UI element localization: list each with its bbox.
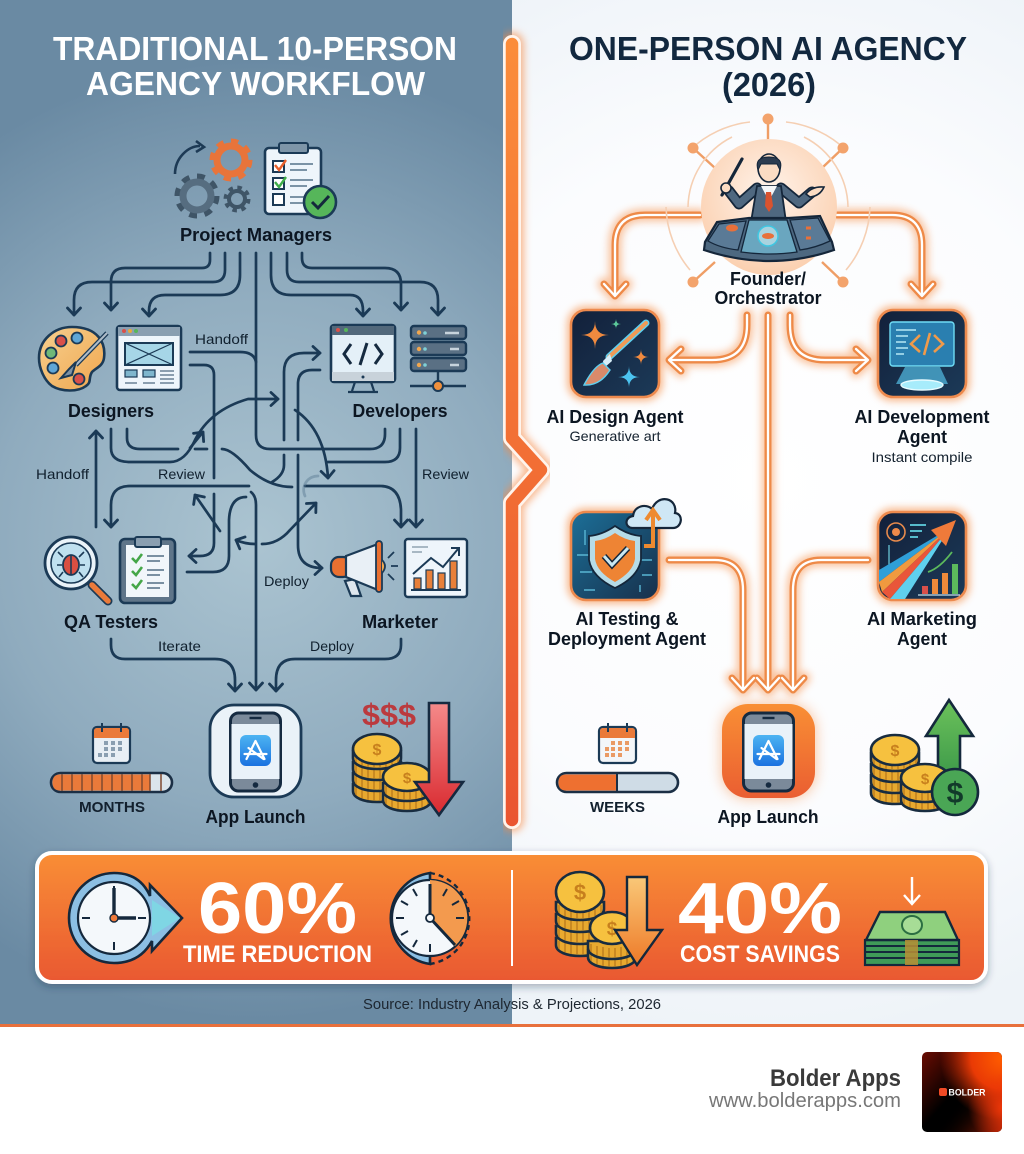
brand name: Bolder Apps <box>770 1065 901 1092</box>
icon: AI testing and deployment agent tile <box>571 499 681 600</box>
workflow labels: Deploy <box>310 638 354 654</box>
label: developers: Developers <box>352 401 448 421</box>
source note: Source: Industry Analysis & Projections, 2026 <box>363 997 661 1013</box>
icon: high cost coins with red arrow: $ <box>403 770 412 787</box>
icon: coins with down arrow: $ <box>607 919 618 940</box>
label: AI design agent: AI Design Agent <box>546 407 684 427</box>
statistic: 60 percent: 60% <box>198 869 357 949</box>
right heading <box>569 30 967 103</box>
footer orange rule <box>0 1024 1024 1027</box>
panel: results banner <box>37 853 986 982</box>
left panel background <box>0 0 512 1025</box>
brand url: www.bolderapps.com <box>708 1090 901 1112</box>
icon: marketer megaphone and chart <box>331 539 467 597</box>
label: founder orchestrator: Founder/ <box>730 269 806 289</box>
label: AI app launch: App Launch <box>718 807 818 827</box>
right heading: (2026) <box>722 66 816 103</box>
icon: AI app launch <box>722 704 815 798</box>
label: project managers: Project Managers <box>180 225 332 245</box>
label: QA testers: QA Testers <box>64 612 158 632</box>
icon: cash stack <box>865 877 959 965</box>
icon: weeks calendar <box>599 723 636 763</box>
workflow labels: Review <box>422 466 470 482</box>
icon: profit coins with green arrow <box>871 700 978 815</box>
workflow labels: Deploy <box>264 573 309 589</box>
workflow labels <box>36 331 470 654</box>
right panel background <box>512 0 1024 1025</box>
label: AI marketing agent <box>867 609 977 649</box>
icon: AI development agent tile <box>878 310 966 397</box>
icon: profit coins with green arrow: $ <box>947 777 964 810</box>
icon: AI marketing agent tile <box>878 512 966 600</box>
label: AI development agent: AI Development <box>854 407 990 427</box>
icon: high cost coins with red arrow: $$$ <box>362 697 416 732</box>
label: AI design agent: Generative art <box>570 428 661 444</box>
label: AI development agent: Instant compile <box>872 449 973 465</box>
workflow labels: Handoff <box>36 466 89 482</box>
label: AI marketing agent: AI Marketing <box>867 609 977 629</box>
label: founder orchestrator <box>714 269 822 308</box>
label: weeks: WEEKS <box>590 799 645 816</box>
brand logo <box>922 1052 1002 1132</box>
label: traditional app launch: App Launch <box>206 807 306 827</box>
divider <box>511 870 513 966</box>
workflow labels: Iterate <box>158 638 201 654</box>
months progress bar <box>51 773 172 792</box>
label: AI development agent: Agent <box>897 427 947 447</box>
label: founder orchestrator: Orchestrator <box>714 288 822 308</box>
label: AI marketing agent: Agent <box>897 629 947 649</box>
icon: AI design agent tile <box>571 310 659 397</box>
label: AI development agent <box>854 407 990 465</box>
label: cost savings: COST SAVINGS <box>680 941 840 968</box>
central orange divider with chevron <box>512 44 541 820</box>
label: designers: Designers <box>68 401 154 421</box>
icon: half clock <box>391 873 469 964</box>
left heading: TRADITIONAL 10-PERSON <box>53 30 457 67</box>
icon: founder orchestrator <box>666 114 870 288</box>
icon: project manager gears and clipboard <box>175 141 336 218</box>
icon: coins with down arrow: $ <box>574 880 586 905</box>
icon: high cost coins with red arrow: $ <box>373 742 382 759</box>
label: marketer: Marketer <box>362 612 438 632</box>
icon: high cost coins with red arrow <box>353 697 463 815</box>
brand logo: BOLDER <box>948 1088 986 1098</box>
label: AI testing and deployment agent: Deployment Agent <box>548 629 706 649</box>
icon: profit coins with green arrow: $ <box>891 743 900 760</box>
tile glows <box>567 306 970 604</box>
label: AI design agent <box>546 407 684 444</box>
workflow labels: Handoff <box>195 331 248 347</box>
left heading <box>53 30 457 102</box>
label: AI testing and deployment agent <box>548 609 706 649</box>
workflow labels: Review <box>158 466 206 482</box>
icon: QA magnifier and checklist <box>45 537 175 603</box>
weeks progress bar <box>557 773 678 792</box>
icon: designers palette and wireframe <box>39 326 181 390</box>
icon: clock with forward arrow <box>69 873 182 963</box>
label: time reduction: TIME REDUCTION <box>183 941 372 968</box>
orange glowing orchestration connectors <box>604 215 933 690</box>
icon: developers monitor and server <box>331 325 466 392</box>
icon: months calendar <box>93 723 130 763</box>
label: months: MONTHS <box>79 799 145 816</box>
left heading: AGENCY WORKFLOW <box>86 65 426 102</box>
chaotic workflow arrows <box>74 253 438 691</box>
label: AI testing and deployment agent: AI Testing & <box>576 609 678 629</box>
icon: profit coins with green arrow: $ <box>921 771 930 788</box>
right heading: ONE-PERSON AI AGENCY <box>569 30 967 67</box>
statistic: 40 percent: 40% <box>678 869 842 949</box>
footer background <box>0 1027 1024 1154</box>
icon: coins with down arrow <box>556 872 662 968</box>
icon: traditional app launch <box>210 705 301 797</box>
